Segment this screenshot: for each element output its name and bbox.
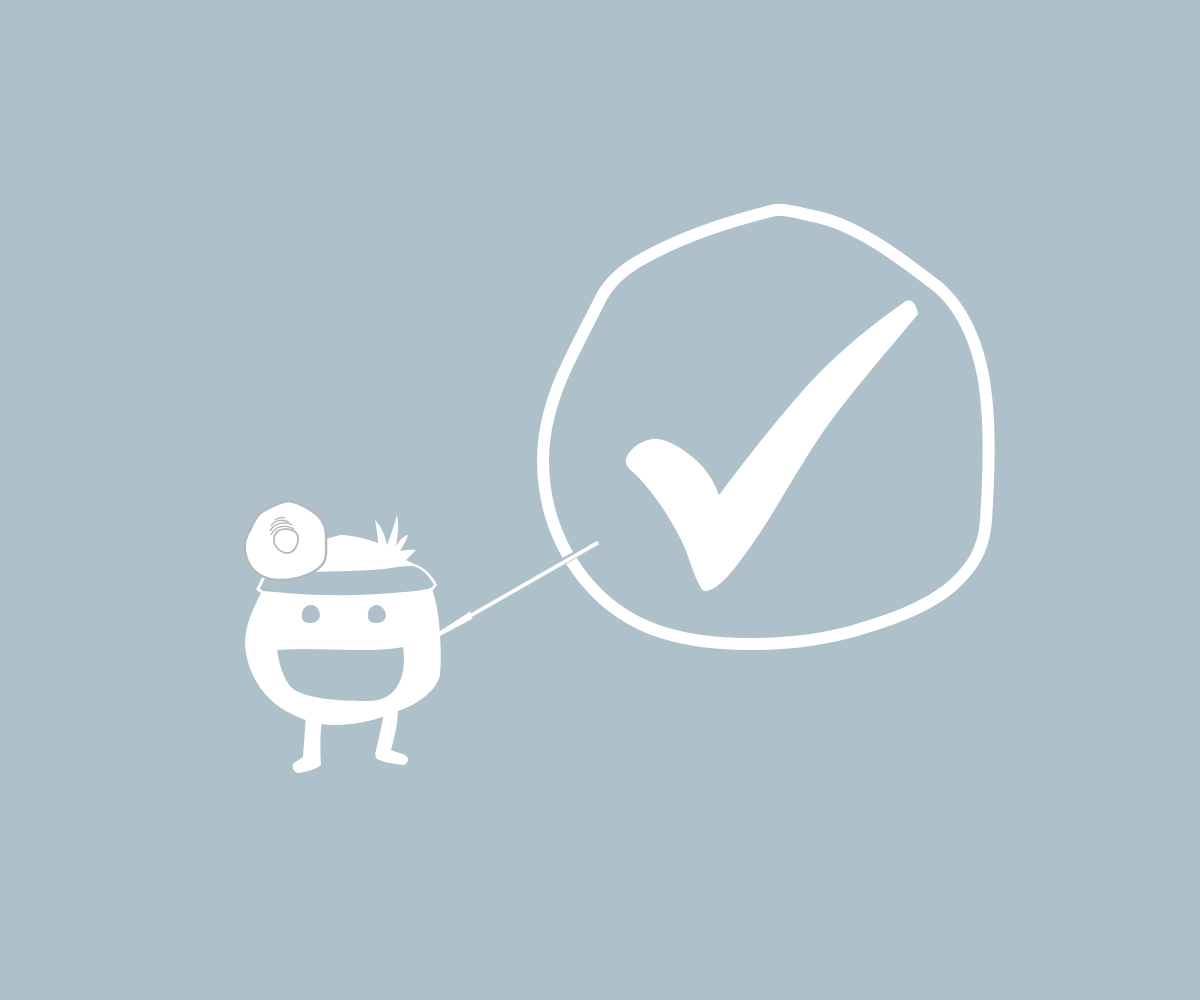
body	[245, 589, 441, 725]
right leg	[375, 708, 408, 765]
hat top with tuft	[300, 515, 437, 590]
mirror reflection arcs	[270, 518, 294, 535]
left eye	[302, 605, 320, 623]
rounded badge outline	[543, 210, 989, 644]
hat band	[258, 566, 434, 594]
pointer stick	[440, 541, 599, 636]
hat band left edge	[258, 577, 264, 592]
right eye	[368, 605, 386, 623]
check mark	[626, 300, 918, 591]
mouth	[277, 647, 404, 701]
mirror lens	[274, 529, 298, 553]
left leg	[293, 715, 322, 773]
pointer stick gap	[470, 542, 598, 614]
head mirror	[245, 501, 326, 580]
character	[245, 501, 599, 773]
pointer stick shadow	[470, 543, 599, 616]
